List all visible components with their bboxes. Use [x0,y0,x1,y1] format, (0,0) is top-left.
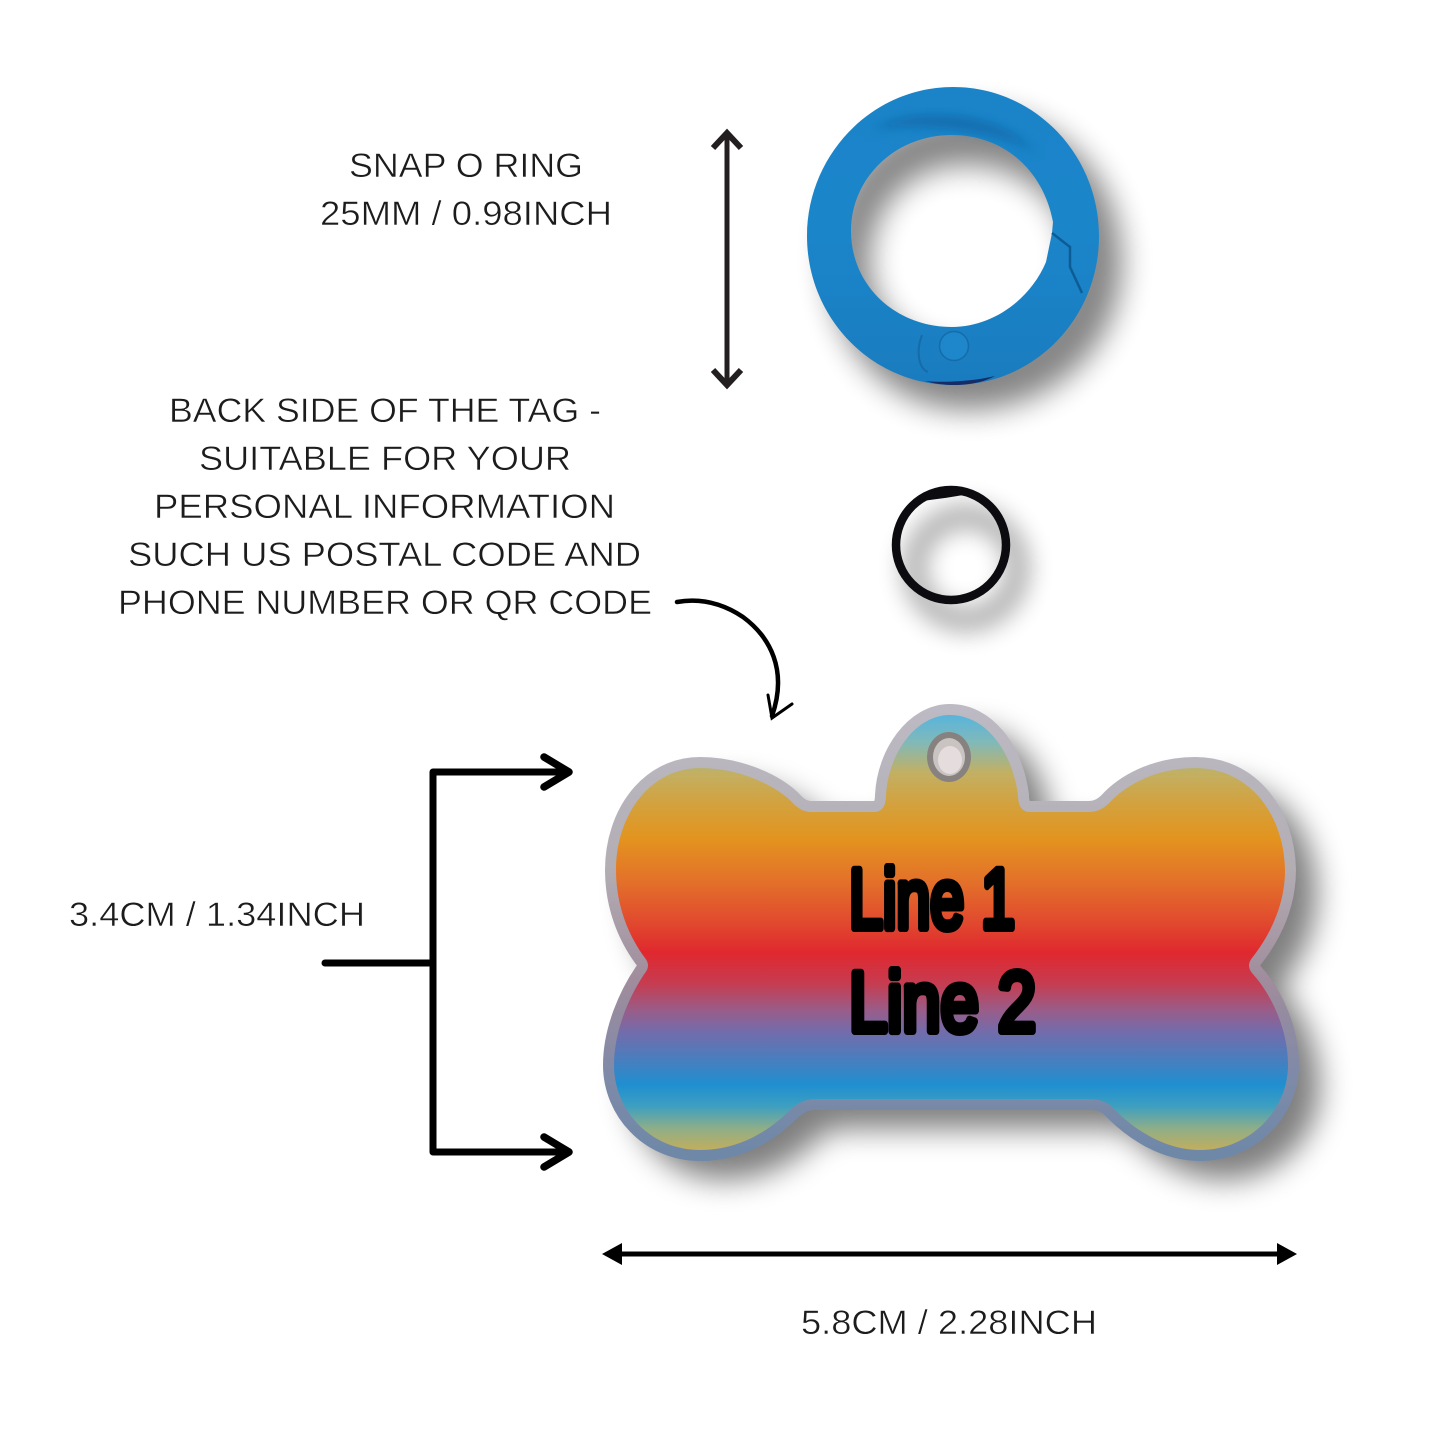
arrow: curved pointer to tag [677,601,792,718]
ring body [807,87,1099,385]
ring inner shade [872,115,1038,155]
text: back side description: BACK SIDE OF THE TAG - [169,392,601,430]
split ring shadow [914,516,1018,620]
tag text [849,852,1036,1049]
text: snap o ring label: 25MM / 0.98INCH [320,195,612,233]
arrow: tag width [602,1243,1297,1265]
text: back side description: SUITABLE FOR YOUR [199,440,571,478]
ring shadow [828,112,1122,410]
arrow: tag height bracket [325,757,569,1167]
icon: blue snap o ring [807,87,1122,410]
arrow: ring height [713,133,741,385]
text: back side description: PHONE NUMBER OR QR CODE [118,584,652,622]
text: tag width label: 5.8CM / 2.28INCH [801,1304,1097,1342]
text: snap o ring label: SNAP O RING [349,147,583,185]
tag rainbow face [614,715,1288,1150]
text: tag height label: 3.4CM / 1.34INCH [69,896,365,934]
text: back side description [118,392,652,622]
ring gate notch [1052,233,1082,293]
tag clear border [614,715,1288,1150]
split ring body [896,490,1006,600]
tag text: Line 2 [849,955,1036,1049]
ring hinge pin [940,332,968,360]
icon: bone shaped tag [614,715,1312,1172]
text: snap o ring label [320,147,612,233]
tag shadow [638,737,1312,1172]
icon: small black split ring [896,489,1018,620]
text: back side description: PERSONAL INFORMATION [154,488,615,526]
tag text: Line 1 [849,852,1015,946]
text: back side description: SUCH US POSTAL CODE AND [128,536,641,574]
tag hole [927,732,971,782]
